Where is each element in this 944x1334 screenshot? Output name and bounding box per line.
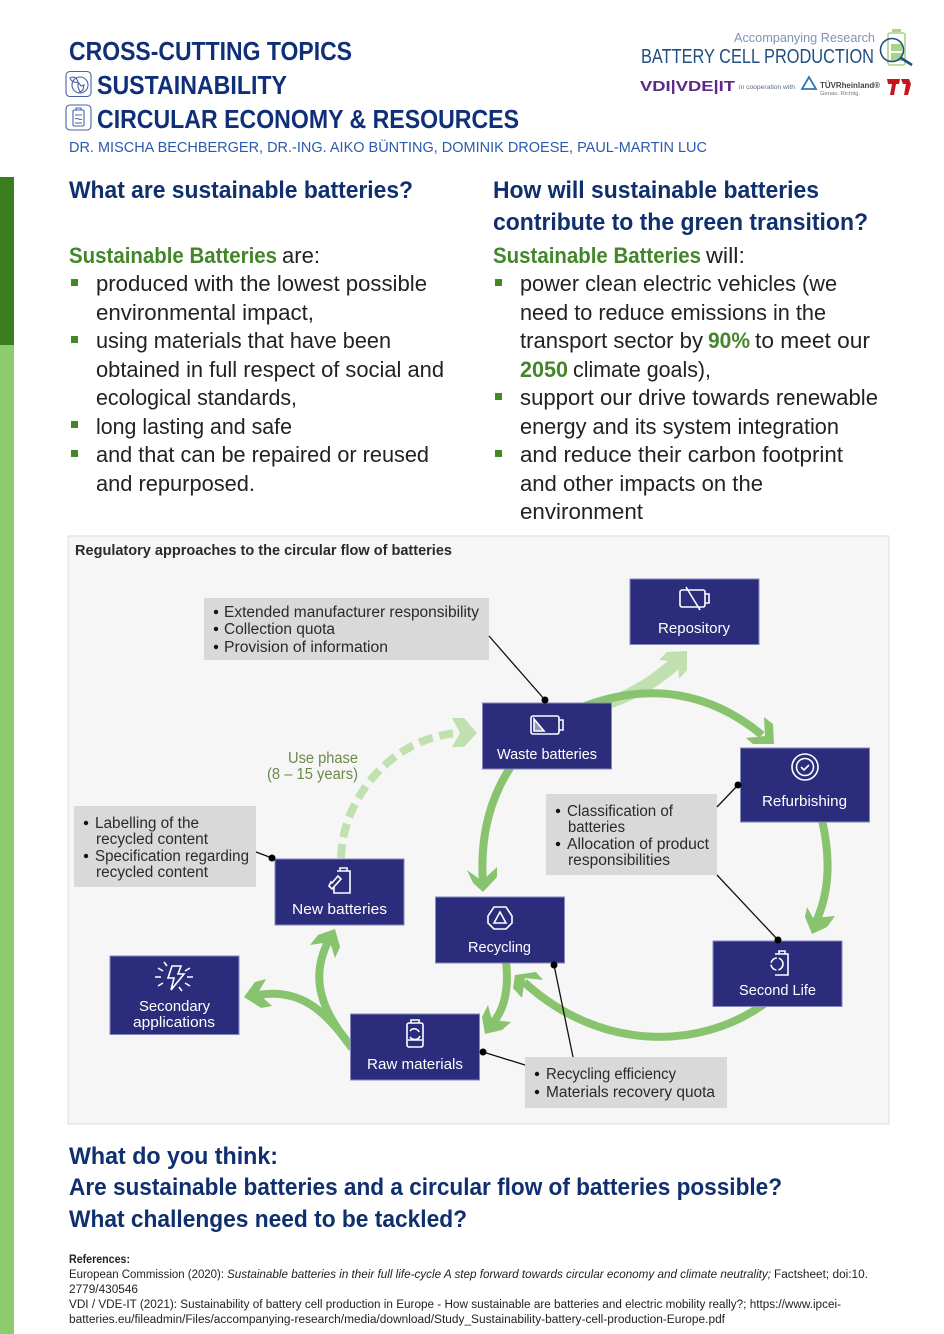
logo block: VDI|VDE|IT (640, 78, 735, 95)
arrow: use phase dashed (341, 718, 477, 858)
references: batteries.eu/fileadmin/Files/accompanying-research/media/download/Study_Sustainability-battery-cell-production-Europe.pdf (69, 1314, 726, 1326)
box: new batteries (275, 859, 404, 925)
callout: recycling efficiency (525, 1057, 727, 1108)
intro line right: Sustainable Batteries (493, 243, 701, 268)
box: new batteries: New batteries (292, 901, 387, 918)
intro line: are: (282, 243, 320, 268)
bullet list right: energy and its system integration (520, 414, 839, 439)
use phase label: Use phase (288, 750, 358, 767)
arrow: second life to recycling (513, 972, 764, 1037)
panel title: Regulatory approaches to the circular flow of batteries (75, 543, 452, 559)
bullet list right: environment (520, 499, 643, 524)
logo block: BATTERY CELL PRODUCTION (641, 46, 874, 68)
box: refurbishing (740, 748, 870, 822)
logo block: Accompanying Research (734, 30, 875, 45)
use phase label (267, 750, 358, 783)
bullet list right: transport sector by (520, 328, 703, 353)
references: References: (69, 1254, 130, 1266)
bullet list right: and reduce their carbon footprint (520, 442, 843, 467)
bullet list right: to meet our (755, 328, 870, 353)
references: Factsheet; doi:10. (774, 1269, 868, 1281)
logo block: Genau. Richtig. (820, 91, 860, 97)
box: waste batteries: Waste batteries (497, 746, 597, 763)
icon: battery crossed out (680, 587, 709, 610)
box: secondary applications: Secondary (139, 998, 210, 1015)
bullet list right: and other impacts on the (520, 471, 763, 496)
right column (493, 177, 878, 524)
references (69, 1254, 868, 1326)
callout: recycled content: recycled content (96, 864, 209, 881)
references: VDI / VDE-IT (2021): Sustainability of battery cell production in Europe - How sustainable are batteries and electric mobility really?; https://www.ipcei- (69, 1299, 841, 1311)
box: raw materials (350, 1014, 480, 1080)
heading: green transition (493, 177, 868, 236)
logo block: in cooperation with (739, 85, 795, 91)
bullet list: and repurposed. (96, 471, 255, 496)
arrow: refurbishing to second life (805, 820, 835, 934)
callout: recycled content: Specification regarding (95, 848, 249, 865)
bullet list: ecological standards, (96, 385, 297, 410)
header title block: CIRCULAR ECONOMY & RESOURCES (97, 104, 519, 134)
box: second life (713, 941, 842, 1006)
logo block (640, 29, 912, 97)
arrow: waste to recycling (467, 765, 512, 892)
callout: classification: Allocation of product (567, 836, 710, 853)
callout: recycling efficiency: Recycling efficiency (546, 1066, 676, 1083)
box: raw materials: Raw materials (367, 1056, 463, 1073)
arrow: raw materials to new batteries (310, 929, 352, 1048)
arrow: raw materials to secondary applications (244, 979, 352, 1048)
bullet list right (495, 271, 878, 524)
panel: circular flow diagram (68, 536, 889, 1124)
icon: battery with recycling (407, 1020, 423, 1047)
box: second life: Second Life (739, 982, 816, 999)
closing question block (69, 1143, 782, 1233)
box: repository (630, 579, 759, 644)
heading: green transition: contribute to the green transition? (493, 209, 868, 236)
icon: lightning bolt with rays (155, 962, 193, 991)
bullet list: produced with the lowest possible (96, 271, 427, 296)
callout: recycling efficiency: Materials recovery quota (546, 1084, 715, 1101)
callout: recycled content: Labelling of the (95, 815, 199, 832)
header title block (66, 36, 707, 156)
bullet list: using materials that have been (96, 328, 391, 353)
box: waste batteries (482, 703, 612, 769)
sidebar strip (0, 177, 14, 1334)
header title block: CROSS-CUTTING TOPICS (69, 36, 352, 66)
arrow: recycling to raw materials (482, 961, 511, 1034)
references: Sustainable batteries in their full life-cycle A step forward towards circular economy and climate neutrality; (227, 1269, 771, 1281)
closing question block: What do you think: (69, 1143, 278, 1170)
bullet list right: power clean electric vehicles (we (520, 271, 837, 296)
references: 2779/430546 (69, 1284, 138, 1296)
callout: classification: batteries (568, 819, 625, 836)
icon: low battery (531, 716, 563, 734)
bullet list right: 90% (708, 328, 750, 353)
authors: DR. MISCHA BECHBERGER, DR.-ING. AIKO BÜNTING, DOMINIK DROESE, PAUL-MARTIN LUC (69, 138, 707, 156)
bullet list right: climate goals), (573, 357, 711, 382)
closing question block: Are sustainable batteries and a circular flow of batteries possible? (69, 1174, 782, 1201)
callout: classification: responsibilities (568, 852, 670, 869)
bullet list right: need to reduce emissions in the (520, 300, 826, 325)
box: repository: Repository (658, 620, 730, 637)
left column (69, 177, 444, 496)
callout: recycled content: recycled content (96, 831, 209, 848)
icon: sustainability globe (66, 72, 91, 96)
bullet list: obtained in full respect of social and (96, 357, 444, 382)
callout: producer responsibility: Collection quota (224, 621, 335, 638)
bullet list: long lasting and safe (96, 414, 292, 439)
references: European Commission (2020): (69, 1269, 224, 1281)
callout: classification (546, 794, 717, 875)
box: secondary applications (110, 956, 239, 1034)
callout: recycled content (74, 806, 256, 887)
use phase label: (8 – 15 years) (267, 766, 358, 783)
callout: producer responsibility: Extended manufacturer responsibility (224, 604, 479, 621)
bullet list: environmental impact, (96, 300, 314, 325)
icon: battery with magnifier (880, 29, 912, 65)
icon: circular economy battery (66, 105, 91, 130)
leader lines (256, 636, 782, 1065)
heading: green transition: How will sustainable batteries (493, 177, 819, 204)
icon: recycle symbol (488, 907, 512, 929)
arrow: waste to refurbishing (585, 693, 774, 744)
bullet list right: 2050 (520, 357, 568, 382)
bullet list: and that can be repaired or reused (96, 442, 429, 467)
heading: what are sustainable batteries: What are sustainable batteries? (69, 177, 413, 204)
icon: refurbish cycle (792, 754, 818, 780)
icon: battery with rotation (771, 951, 788, 975)
intro line right: will: (705, 243, 745, 268)
box: recycling: Recycling (468, 939, 531, 956)
callout: producer responsibility (204, 598, 489, 660)
logo block: TÜVRheinland® (820, 81, 880, 90)
callout: producer responsibility: Provision of information (224, 639, 388, 656)
box: secondary applications: applications (133, 1014, 215, 1031)
box: refurbishing: Refurbishing (762, 793, 847, 810)
icon: battery with check (329, 868, 350, 893)
callout: classification: Classification of (567, 803, 674, 820)
intro line: Sustainable Batteries (69, 243, 277, 268)
arrow: waste to repository (588, 651, 687, 708)
bullet list (71, 271, 444, 496)
bullet list right: support our drive towards renewable (520, 385, 878, 410)
closing question block: What challenges need to be tackled? (69, 1206, 467, 1233)
box: recycling (436, 897, 564, 963)
header title block: SUSTAINABILITY (97, 70, 287, 100)
